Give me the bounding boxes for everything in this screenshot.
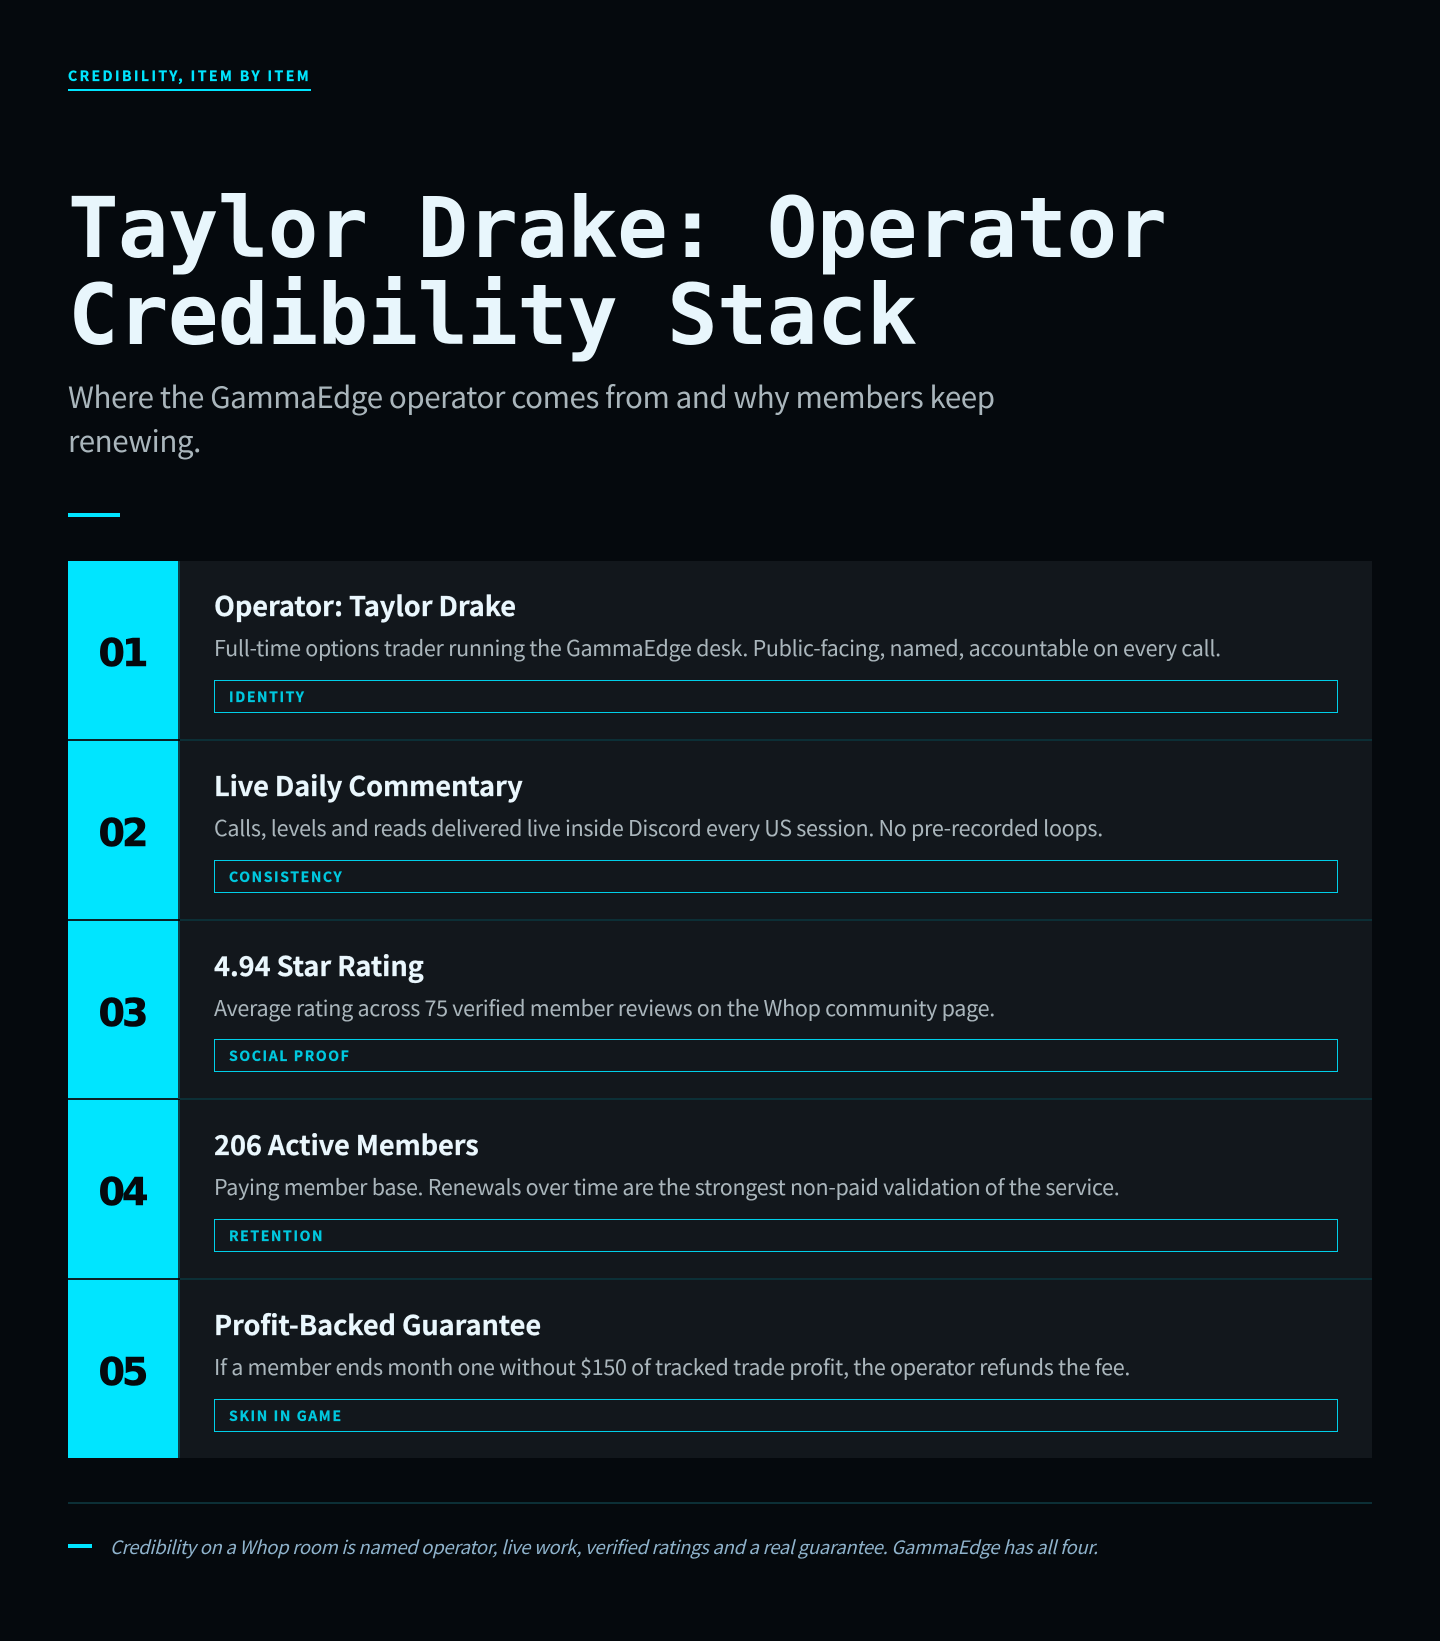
number cell 02 [68,741,178,919]
footer accent dash [68,1544,92,1548]
title: Taylor Drake: Operator [68,179,1166,277]
panel: row 03 rating [68,921,1372,1098]
subtitle: Where the GammaEdge operator comes from and why members keep [68,375,995,417]
accent bar [68,513,120,517]
number cell 03: 03 [99,991,145,1035]
tag: retention [214,1219,1338,1252]
row heading: Profit-Backed Guarantee [214,1303,541,1343]
tag: identity: IDENTITY [229,687,306,707]
title: Credibility Stack [68,266,917,364]
title [68,179,1166,364]
number cell 02: 02 [99,811,145,855]
number cell 01 [68,561,178,739]
row heading: 4.94 Star Rating [214,944,424,984]
row description: Calls, levels and reads delivered live inside Discord every US session. No pre-recorded loops. [214,812,1103,843]
row heading: Live Daily Commentary [214,764,523,804]
subtitle [68,375,995,461]
tag: skin in game: SKIN IN GAME [229,1406,343,1426]
row description: If a member ends month one without $150 of tracked trade profit, the operator refunds the fee. [214,1351,1130,1382]
panel: row 05 guarantee [68,1280,1372,1458]
tag: retention: RETENTION [229,1226,324,1246]
number cell 01: 01 [99,631,145,675]
row description: Average rating across 75 verified member reviews on the Whop community page. [214,992,995,1023]
panel: row 01 operator [68,561,1372,739]
eyebrow label: CREDIBILITY, ITEM BY ITEM [68,66,311,86]
tag: consistency [214,860,1338,893]
footer note: Credibility on a Whop room is named operator, live work, verified ratings and a real guarantee. GammaEdge has all four. [110,1534,1098,1560]
number cell 05 [68,1280,178,1458]
number cell 05: 05 [99,1350,145,1394]
row description: Paying member base. Renewals over time are the strongest non-paid validation of the service. [214,1171,1119,1202]
tag: social proof [214,1039,1338,1072]
panel: row 02 commentary [68,741,1372,919]
row heading: 206 Active Members [214,1123,479,1163]
tag: identity [214,680,1338,713]
tag: skin in game [214,1399,1338,1432]
row description: Full-time options trader running the GammaEdge desk. Public-facing, named, accountable on every call. [214,632,1221,663]
tag: social proof: SOCIAL PROOF [229,1046,350,1066]
row heading: Operator: Taylor Drake [214,584,516,624]
panel: row 04 members [68,1100,1372,1278]
tag: consistency: CONSISTENCY [229,867,343,887]
number cell 04: 04 [99,1170,145,1214]
number cell 03 [68,921,178,1098]
subtitle: renewing. [68,419,201,461]
number cell 04 [68,1100,178,1278]
